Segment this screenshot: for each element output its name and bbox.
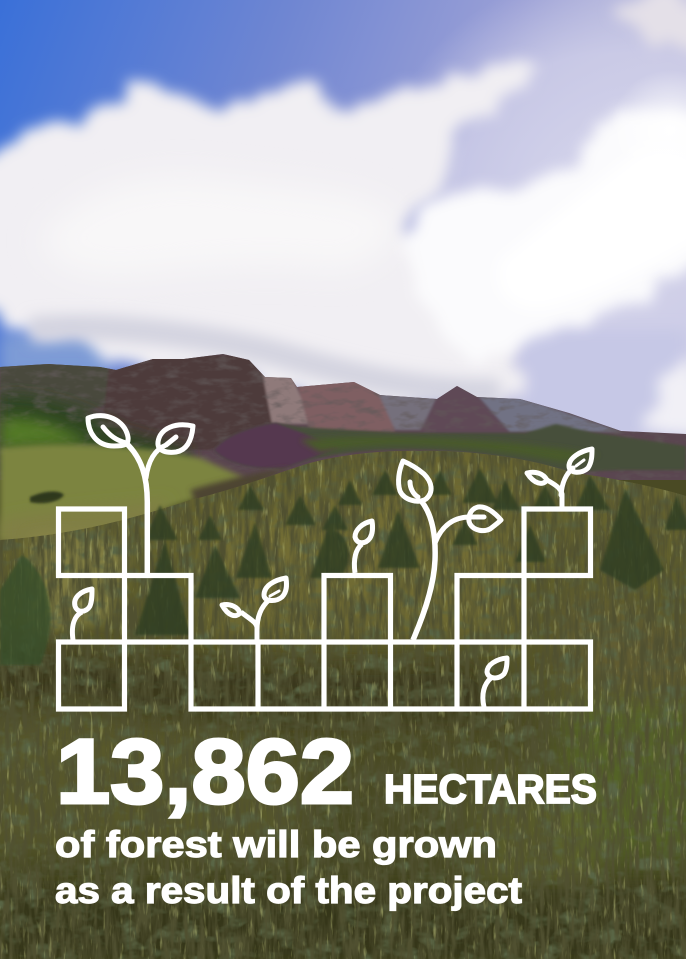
unit label: HECTARES [384, 766, 597, 812]
sky [0, 0, 686, 450]
caption line 2: as a result of the project [55, 870, 522, 911]
sprout: top right [527, 449, 592, 507]
sprout: two leaves centre-left [222, 578, 287, 640]
foreground hillside with grass [0, 451, 686, 959]
dark hills and lit valley [0, 418, 686, 600]
seedling grid: stepped squares [58, 509, 590, 709]
sprout: lower right [483, 658, 507, 707]
sprout: on centre square [354, 521, 373, 573]
distant mountains [0, 340, 686, 480]
sprout: tall left [88, 416, 193, 573]
sprout: tall centre [399, 461, 501, 640]
grass texture [0, 450, 686, 959]
sprouts [72, 416, 592, 707]
sprout: small left [72, 589, 92, 640]
caption line 1: of forest will be grown [55, 824, 497, 865]
headline number: 13,862 [56, 721, 354, 823]
conifer trees [0, 468, 686, 665]
clouds [0, 0, 686, 450]
